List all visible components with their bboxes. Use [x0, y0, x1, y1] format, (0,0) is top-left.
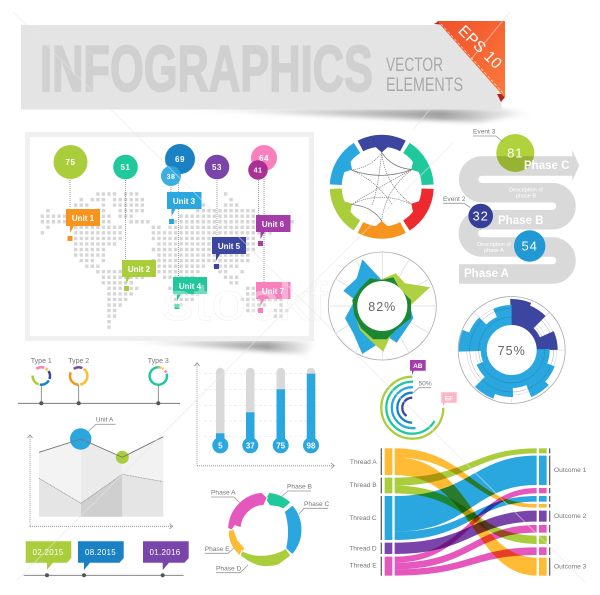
phase labels: Phase C [304, 501, 330, 508]
marker: Unit 1 [66, 209, 100, 241]
radar chart 82%: 82% [368, 300, 396, 314]
label Unit A: Unit A [96, 416, 114, 424]
event circle 54: 54 [521, 238, 538, 254]
panel: world map [28, 134, 312, 338]
axes [28, 435, 172, 529]
bubble: 53 [205, 155, 229, 179]
flows [395, 448, 537, 576]
marker: Unit 2: Unit 2 [128, 265, 151, 274]
subtitle [386, 54, 463, 96]
subtitle: VECTOR [386, 54, 443, 76]
thread labels [349, 459, 377, 570]
type labels: Type 2 [68, 358, 89, 365]
bubble: 75 [54, 145, 88, 179]
radar chart 82% [328, 252, 436, 360]
concentric arc chart 50% [381, 377, 443, 439]
thread labels: Thread B [350, 482, 377, 489]
bubble: 51 [113, 155, 138, 179]
gauge 98: 98 [307, 442, 316, 450]
phase descriptions: Description of [477, 242, 511, 248]
axes [194, 363, 334, 468]
date timeline [24, 541, 189, 577]
marker: Unit 6 [256, 215, 290, 246]
date tag 01.2016: 01.2016 [149, 548, 181, 557]
bubble: 53: 53 [212, 163, 222, 172]
outcome labels: Outcome 1 [554, 467, 587, 474]
outcome labels: Outcome 2 [554, 513, 587, 520]
phase labels: Phase C [524, 160, 569, 172]
event labels [443, 128, 503, 208]
event circle 32: 32 [472, 208, 489, 224]
tag EF [441, 392, 457, 406]
type labels: Type 3 [148, 358, 169, 365]
bubble: 75: 75 [66, 158, 75, 167]
gauge 37: 37 [246, 442, 255, 450]
bubble: 64: 64 [259, 154, 269, 163]
area chart [28, 416, 172, 529]
marker: Unit 6: Unit 6 [262, 220, 285, 229]
date tag 02.2015 [26, 541, 71, 570]
header shadow [170, 109, 532, 122]
cycle arrows [228, 492, 302, 567]
phase descriptions [477, 188, 543, 254]
thermometer chart [194, 363, 334, 468]
bubble: 69 [165, 144, 195, 174]
label 50%: 50% [418, 380, 432, 388]
top line [39, 437, 163, 457]
dotted world map [41, 194, 296, 327]
subtitle: ELEMENTS [386, 74, 463, 96]
radial bar chart 75% [458, 296, 565, 404]
date tag 02.2015: 02.2015 [32, 548, 64, 557]
snake timeline [443, 128, 579, 280]
tag EF: EF [445, 396, 453, 402]
phase descriptions: phase B [516, 194, 536, 200]
thread labels: Thread A [350, 459, 377, 466]
bubble: 41: 41 [254, 168, 262, 174]
chord diagram [318, 123, 445, 250]
marker: Unit 5 [212, 237, 246, 269]
lower line [39, 474, 163, 503]
sankey diagram [381, 448, 550, 576]
outcome labels: Outcome 3 [554, 564, 587, 570]
phase labels: Phase B [498, 215, 543, 227]
phase labels [464, 160, 569, 280]
thread labels: Thread C [349, 515, 377, 522]
right columns [539, 448, 550, 576]
radial bar chart 75%: 75% [498, 344, 526, 358]
marker: Unit 3: Unit 3 [173, 197, 196, 206]
marker: Unit 7 [256, 282, 290, 313]
bubble: 69: 69 [175, 155, 185, 164]
phase descriptions: phase A [484, 248, 504, 254]
phase labels: Phase A [464, 268, 509, 280]
ribbon: EPS 10 [434, 21, 505, 102]
date tag 08.2015 [78, 541, 124, 570]
label Unit A [88, 416, 116, 432]
phase labels: Phase A [211, 490, 236, 496]
type labels: Type 1 [31, 358, 52, 365]
date tag 01.2016 [143, 541, 189, 570]
event labels: Event 2 [443, 196, 466, 203]
event circle 81 [496, 134, 534, 172]
green dot [116, 451, 129, 464]
bubble: 51: 51 [121, 163, 130, 172]
event circle 81: 81 [507, 146, 524, 160]
area layers [39, 439, 81, 517]
ribbon: EPS 10: EPS 10 [455, 22, 505, 73]
phase labels: Phase D [216, 566, 242, 572]
unit A dot [70, 428, 91, 450]
type labels [31, 358, 169, 365]
phase descriptions: Description of [509, 188, 543, 194]
date tag 08.2015: 08.2015 [85, 548, 116, 557]
donut: type 1 [29, 364, 53, 388]
gauge 5: 5 [218, 442, 223, 450]
event labels: Event 3 [473, 128, 496, 136]
type timeline [18, 358, 180, 405]
marker: Unit 4 [173, 277, 207, 309]
donut: type 2 [67, 364, 91, 388]
bubble: 38: 38 [167, 174, 175, 181]
outcome labels [554, 467, 587, 570]
label 50% [413, 380, 432, 393]
left columns [381, 448, 392, 576]
thread labels: Thread D [349, 546, 377, 552]
bubble: 41 [248, 160, 268, 180]
event circle 54 [514, 230, 545, 262]
phase labels: Phase E [205, 546, 230, 553]
donut: type 3 [146, 364, 171, 388]
tag AB: AB [413, 363, 423, 370]
phase labels: Phase B [287, 484, 313, 490]
bubble: 38 [161, 166, 181, 186]
gauge 75: 75 [276, 442, 286, 450]
bubble: 64 [251, 145, 277, 171]
map panel shadow [120, 341, 316, 354]
marker: Unit 5: Unit 5 [218, 242, 241, 251]
thread labels: Thread E [350, 562, 377, 570]
marker: Unit 1: Unit 1 [72, 214, 95, 223]
marker: Unit 7: Unit 7 [262, 287, 285, 296]
header banner [21, 25, 502, 110]
marker: Unit 2 [122, 260, 156, 291]
phase cycle [205, 484, 330, 573]
marker: Unit 3 [167, 192, 202, 224]
tag AB [410, 360, 426, 375]
event circle 32 [468, 204, 493, 228]
title: INFOGRAPHICS [40, 32, 373, 105]
phase labels [205, 484, 330, 573]
watermark: stockf [162, 272, 328, 332]
dotted leader lines [70, 171, 264, 282]
marker: Unit 4: Unit 4 [179, 282, 202, 291]
